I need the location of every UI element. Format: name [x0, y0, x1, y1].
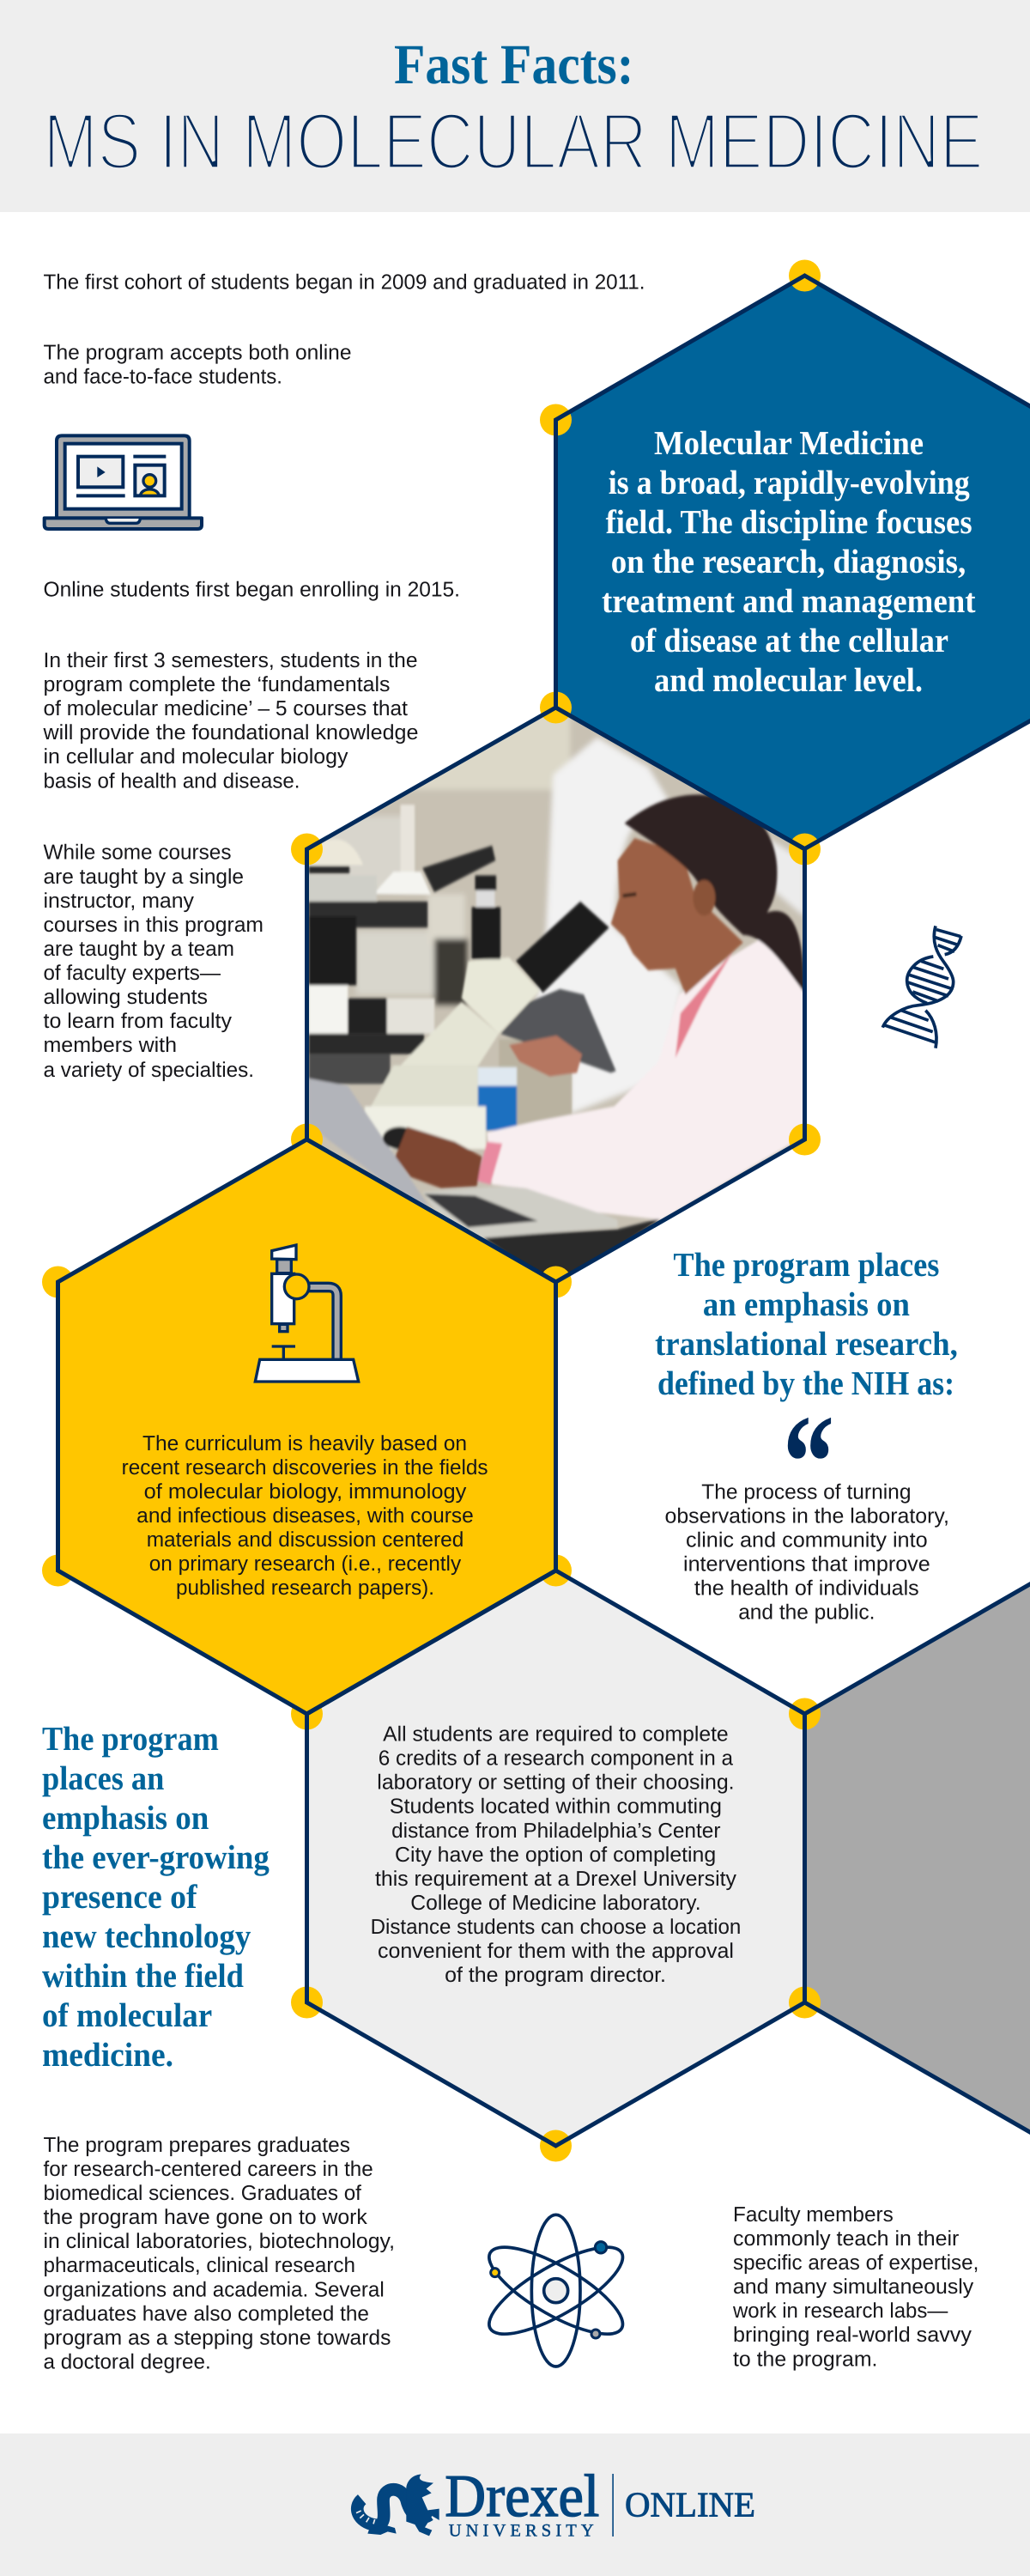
text: research component: this requirement at a Drexel University — [375, 1868, 737, 1891]
text: nih definition: clinic and community into — [686, 1528, 928, 1552]
text: molecular medicine definition: Molecular Medicine — [654, 424, 924, 462]
text: research component: laboratory or setting of their choosing. — [377, 1771, 735, 1795]
text: research component: City have the option of completing — [395, 1844, 716, 1867]
hexagon: dark grey fill — [805, 1571, 1030, 2146]
text: research component: Students located within commuting — [390, 1795, 722, 1819]
text: team taught courses: allowing students — [43, 986, 208, 1009]
text: first 3 semesters: In their first 3 semesters, students in the — [43, 649, 417, 672]
text: faculty members: and many simultaneously — [733, 2275, 974, 2299]
text: molecular medicine definition — [602, 424, 975, 699]
photo: scientist at a microscope — [309, 717, 803, 1273]
logo: online: ONLINE — [625, 2485, 755, 2524]
text: team taught courses — [43, 841, 264, 1082]
logo: drexel dragon — [356, 2475, 439, 2536]
heading: new technology: The program — [42, 1720, 219, 1758]
text: research component: Distance students can choose a location — [371, 1916, 741, 1939]
text: team taught courses: are taught by a team — [43, 938, 234, 961]
text: careers: graduates have also completed the — [43, 2302, 369, 2325]
text: careers: a doctoral degree. — [43, 2350, 211, 2373]
text: research component — [371, 1723, 741, 1987]
text: curriculum: The curriculum is heavily based on — [142, 1432, 467, 1455]
heading: new technology: of molecular — [42, 1996, 212, 2034]
text: first 3 semesters — [42, 649, 419, 793]
text: faculty members: to the program. — [733, 2348, 877, 2371]
text: team taught courses: a variety of specialties. — [43, 1059, 254, 1082]
text: curriculum: recent research discoveries in the fields — [122, 1456, 488, 1479]
yellow vertex dots — [42, 259, 821, 2162]
text: nih definition — [664, 1480, 949, 1625]
text: team taught courses: courses in this program — [43, 914, 264, 937]
heading: new technology: presence of — [42, 1878, 197, 1916]
text: faculty members: work in research labs— — [732, 2300, 948, 2323]
text: first 3 semesters: basis of health and disease. — [43, 769, 300, 793]
hexagon: light grey fill — [307, 1571, 805, 2146]
heading: new technology: emphasis on — [42, 1799, 209, 1837]
icon: laptop — [45, 435, 202, 529]
text: team taught courses: While some courses — [43, 841, 232, 864]
header band — [0, 0, 1030, 212]
text: careers: the program have gone on to work — [43, 2206, 368, 2229]
text: research component: College of Medicine laboratory. — [410, 1892, 701, 1915]
text: team taught courses: members with — [43, 1034, 177, 1057]
text: curriculum: published research papers). — [176, 1577, 434, 1600]
text: careers: biomedical sciences. Graduates of — [43, 2182, 361, 2205]
text: curriculum: on primary research (i.e., recently — [149, 1552, 462, 1576]
text: research component: distance from Philadelphia’s Center — [391, 1820, 721, 1843]
text: faculty members: specific areas of expertise, — [733, 2251, 978, 2275]
icon: microscope — [255, 1245, 359, 1382]
text: molecular medicine definition: is a broad, rapidly-evolving — [609, 464, 970, 501]
text: team taught courses: of faculty experts— — [43, 962, 221, 985]
text: first 3 semesters: of molecular medicine’ – 5 courses that — [43, 697, 408, 720]
text: research component: of the program director. — [445, 1964, 666, 1987]
text: nih definition: interventions that improve — [683, 1552, 930, 1577]
text: curriculum: and infectious diseases, with course — [136, 1504, 474, 1528]
text: research component: All students are required to complete — [383, 1723, 729, 1747]
text: first 3 semesters: in cellular and molecular biology — [43, 745, 348, 769]
heading: new technology: places an — [42, 1759, 164, 1797]
text: careers: program as a stepping stone towards — [43, 2326, 391, 2349]
text: team taught courses: instructor, many — [43, 890, 195, 913]
text: careers: in clinical laboratories, biotechnology, — [43, 2230, 395, 2253]
text: faculty members: commonly teach in their — [733, 2227, 959, 2251]
heading: new technology — [42, 1720, 270, 2074]
text: nih definition: observations in the laboratory, — [664, 1504, 949, 1528]
text: careers: The program prepares graduates — [43, 2134, 350, 2157]
footer band — [0, 2433, 1030, 2576]
heading: new technology: the ever-growing — [42, 1838, 270, 1876]
text: first 3 semesters: will provide the foundational knowledge — [42, 721, 418, 744]
text: team taught courses: to learn from faculty — [43, 1010, 233, 1033]
text: molecular medicine definition: of disease at the cellular — [630, 622, 948, 659]
text: faculty members: bringing real-world savvy — [733, 2324, 972, 2347]
logo: drexel wordmark: Drexel — [445, 2464, 599, 2530]
heading: new technology: medicine. — [42, 2036, 173, 2074]
hexagon: yellow fill — [58, 1139, 556, 1714]
text: first cohort: The first cohort of students began in 2009 and graduated in 2011. — [43, 271, 645, 294]
text: faculty members: Faculty members — [733, 2203, 894, 2227]
text: online and face-to-face: and face-to-face students. — [43, 366, 282, 388]
text: online and face-to-face — [43, 342, 351, 388]
text: molecular medicine definition: on the research, diagnosis, — [611, 543, 966, 580]
text: nih definition: and the public. — [738, 1601, 875, 1625]
text: research component: convenient for them with the approval — [378, 1940, 734, 1963]
heading: translational research: translational research, — [655, 1325, 958, 1363]
text: molecular medicine definition: treatment and management — [602, 582, 975, 620]
text: first 3 semesters: program complete the ‘fundamentals — [43, 673, 390, 696]
heading: translational research: defined by the NIH as: — [657, 1364, 954, 1402]
heading: new technology: new technology — [42, 1917, 251, 1955]
text: molecular medicine definition: field. The discipline focuses — [606, 503, 972, 541]
text: curriculum: materials and discussion centered — [147, 1528, 464, 1552]
hexagon: blue fill — [556, 276, 1030, 848]
heading: translational research — [655, 1246, 958, 1402]
text: curriculum — [122, 1432, 488, 1600]
icon: quotation mark: “ — [783, 1388, 834, 1538]
heading: new technology: within the field — [42, 1957, 244, 1995]
text: online and face-to-face: The program accepts both online — [43, 342, 351, 364]
heading: translational research: an emphasis on — [703, 1285, 910, 1323]
text: careers — [43, 2134, 395, 2373]
hexagon outlines — [58, 276, 1030, 2146]
icon: atom — [478, 2215, 633, 2366]
text: curriculum: of molecular biology, immunology — [144, 1480, 467, 1504]
icon: dna helix — [882, 926, 961, 1048]
heading: translational research: The program places — [673, 1246, 939, 1284]
text: faculty members — [732, 2203, 978, 2371]
logo: university: UNIVERSITY — [449, 2521, 594, 2540]
text: nih definition: the health of individuals — [694, 1577, 919, 1601]
text: careers: pharmaceuticals, clinical research — [43, 2254, 355, 2277]
text: molecular medicine definition: and molecular level. — [654, 661, 923, 699]
text: careers: organizations and academia. Several — [43, 2278, 385, 2301]
title: fast facts: Fast Facts: — [394, 33, 633, 96]
text: team taught courses: are taught by a single — [43, 866, 244, 889]
text: careers: for research-centered careers in the — [43, 2158, 373, 2181]
text: research component: 6 credits of a research component in a — [379, 1747, 733, 1771]
text: nih definition: The process of turning — [701, 1480, 912, 1504]
text: online enrolment: Online students first began enrolling in 2015. — [43, 579, 460, 601]
